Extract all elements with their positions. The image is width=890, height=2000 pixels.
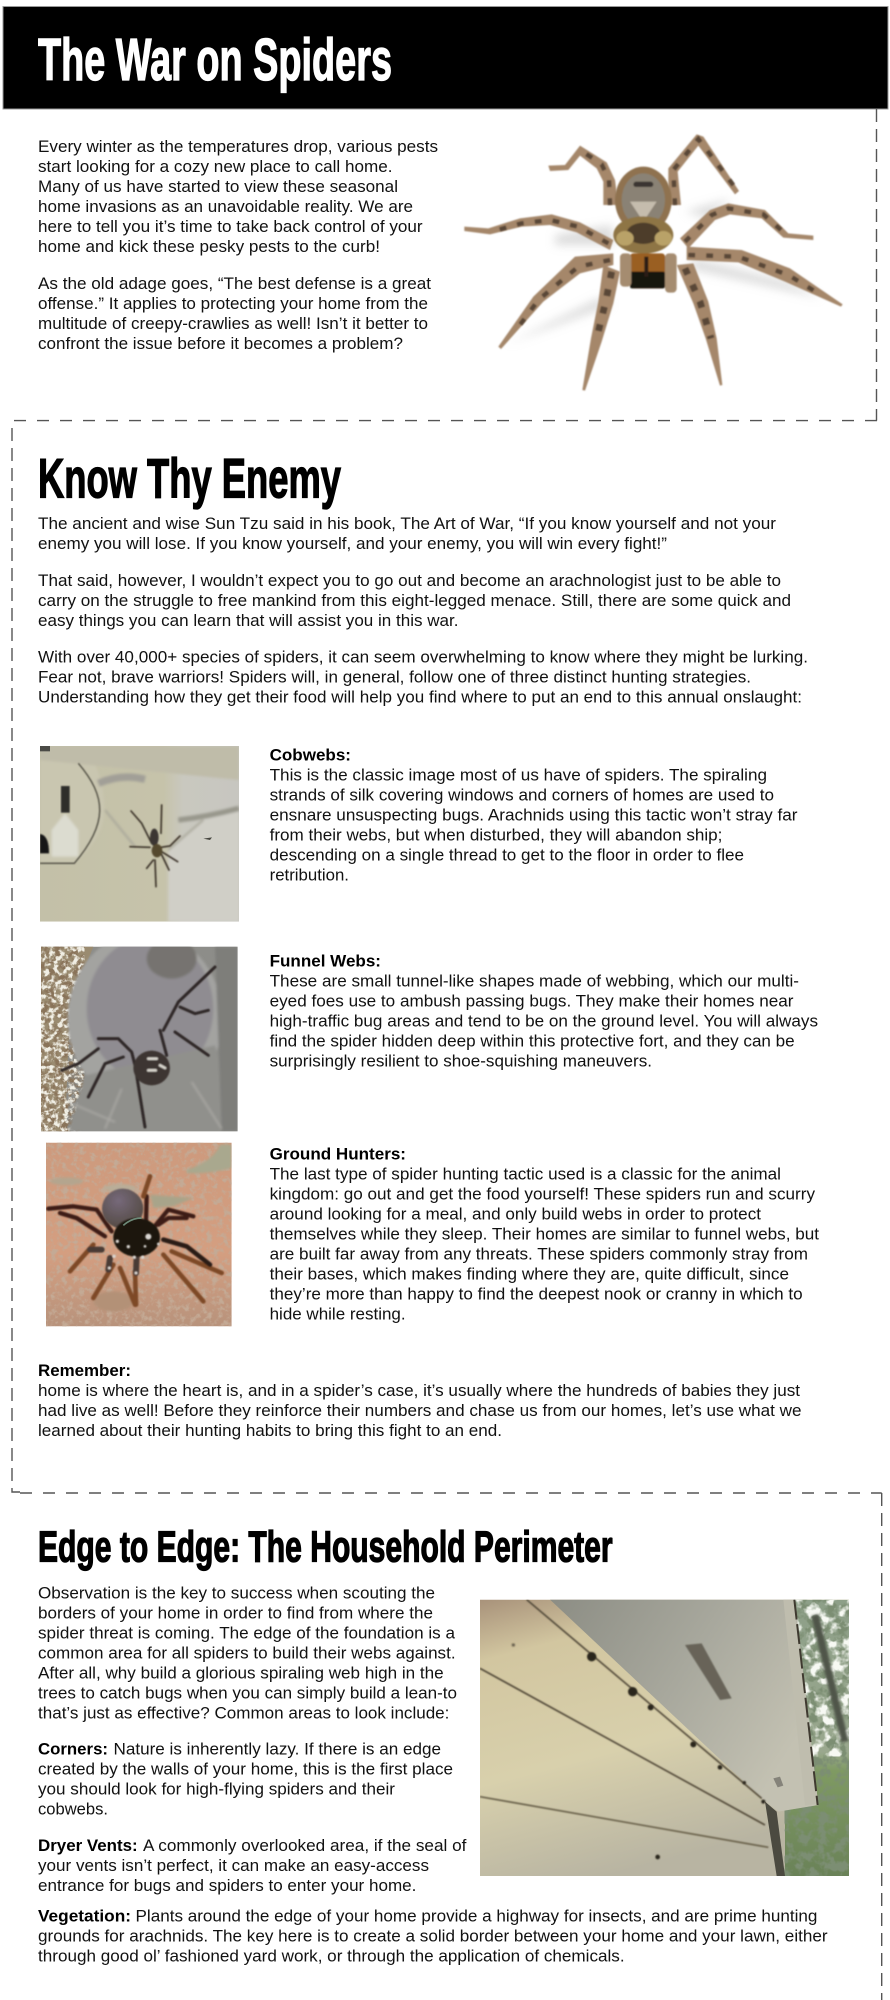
text block: ground hunters: they’re more than happy to find the deepest nook or cranny in which to <box>270 1286 803 1304</box>
text block: vegetation: through good ol’ fashioned yard work, or through the application of chemicals. <box>38 1948 625 1966</box>
text block: ground hunters: around looking for a meal, and only build webs in order to protect <box>270 1206 761 1224</box>
text block: dryer vents <box>38 1837 467 1895</box>
text block: hunting strategies paragraph: Fear not, brave warriors! Spiders will, in general, follow one of three distinct hunting strategies. <box>38 669 751 687</box>
text block: dryer vents: entrance for bugs and spiders to enter your home. <box>38 1877 416 1895</box>
text block: cobwebs: retribution. <box>270 866 349 884</box>
text block: vegetation: grounds for arachnids. The key here is to create a solid border between your home and your lawn, either <box>38 1928 828 1946</box>
text block: cobwebs: Cobwebs: <box>270 746 351 764</box>
funnel spider legs <box>62 967 215 1127</box>
text block: ground hunters: themselves while they sleep. Their homes are similar to funnel webs, but <box>270 1226 819 1244</box>
text block: intro first paragraph: start looking for a cozy new place to call home. <box>38 158 392 176</box>
text block: ground hunters: The last type of spider hunting tactic used is a classic for the animal <box>270 1166 781 1184</box>
text block: hunting strategies paragraph: With over 40,000+ species of spiders, it can seem overwhelming to know where they might be lurking. <box>38 649 808 667</box>
cephalothorax <box>613 216 673 254</box>
title banner <box>3 6 888 109</box>
text block: intro first paragraph: home and kick these pesky pests to the curb! <box>38 238 380 256</box>
text block: observation paragraph: spider threat is coming. The edge of the foundation is a <box>38 1624 456 1642</box>
image: funnel web spider <box>41 931 238 1131</box>
text block: corners: Corners: <box>38 1741 108 1759</box>
legs <box>548 146 618 205</box>
text block: funnel webs: Funnel Webs: <box>270 952 381 970</box>
text block: intro first paragraph <box>38 138 438 256</box>
text block: hunting strategies paragraph: Understanding how they get their food will help you find where to put an end to this annual onslaught: <box>38 689 802 707</box>
image: house siding and eaves <box>480 1600 849 1876</box>
text block: dryer vents: Dryer Vents: <box>38 1837 138 1855</box>
text block: corners: you should look for high-flying spiders and their <box>38 1781 396 1799</box>
text block: vegetation: Plants around the edge of your home provide a highway for insects, and are prime hunting <box>136 1908 817 1926</box>
text block: intro second paragraph: offense.” It applies to protecting your home from the <box>38 295 428 313</box>
panel: household perimeter <box>20 1493 882 2000</box>
text block: ground hunters <box>270 1146 819 1324</box>
text block: dryer vents: A commonly overlooked area, if the seal of <box>143 1837 467 1855</box>
text block: remember: home is where the heart is, and in a spider’s case, it’s usually where the hundreds of babies they just <box>38 1382 800 1400</box>
text block: vegetation: Vegetation: <box>38 1908 131 1926</box>
text block: corners: created by the walls of your home, this is the first place <box>38 1761 453 1779</box>
panel: know thy enemy <box>12 428 819 1492</box>
text block: cobwebs: This is the classic image most of us have of spiders. The spiraling <box>270 766 767 784</box>
image: cobweb spider on wall outlet <box>40 746 239 922</box>
text block: dryer vents: your vents isn’t perfect, it can make an easy-access <box>38 1857 429 1875</box>
ground spider legs <box>48 1176 222 1305</box>
image: ground hunter spider <box>46 1143 232 1326</box>
text block: remember: learned about their hunting habits to bring this fight to an end. <box>38 1422 502 1440</box>
text block: corners: Nature is inherently lazy. If there is an edge <box>114 1741 441 1759</box>
small spider <box>130 805 180 887</box>
text block: observation paragraph: common area for all spiders to build their webs against. <box>38 1644 456 1662</box>
text block: observation paragraph: borders of your home in order to find from where the <box>38 1604 433 1622</box>
panel: introduction <box>12 109 877 428</box>
text block: vegetation <box>38 1908 828 1966</box>
text block: remember <box>38 1362 802 1440</box>
leg markings <box>492 139 818 338</box>
fangs <box>630 253 665 288</box>
text block: intro second paragraph <box>38 275 431 353</box>
abdomen <box>615 167 672 233</box>
text block: intro first paragraph: Every winter as the temperatures drop, various pests <box>38 138 438 156</box>
text block: corners <box>38 1741 453 1819</box>
text block: intro second paragraph: confront the issue before it becomes a problem? <box>38 335 403 353</box>
text block: arachnologist paragraph: That said, however, I wouldn’t expect you to go out and become an arachnologist just to be able to <box>38 572 781 590</box>
text block: corners: cobwebs. <box>38 1801 108 1819</box>
text block: observation paragraph <box>38 1584 457 1722</box>
heading: Edge to Edge: The Household Perimeter <box>38 1523 613 1572</box>
text block: observation paragraph: trees to catch bugs when you can simply build a lean-to <box>38 1684 457 1702</box>
text block: funnel webs: find the spider hidden deep within this protective fort, and they can be <box>270 1032 795 1050</box>
text block: Sun Tzu quote <box>38 515 777 553</box>
text block: ground hunters: Ground Hunters: <box>270 1146 406 1164</box>
text block: ground hunters: are built far away from any threats. These spiders commonly stray from <box>270 1246 808 1264</box>
text block: cobwebs: from their webs, but when disturbed, they will abandon ship; <box>270 826 722 844</box>
text block: Sun Tzu quote: enemy you will lose. If you know yourself, and your enemy, you will win every fight!” <box>38 535 667 553</box>
text block: ground hunters: their bases, which makes finding where they are, quite difficult, since <box>270 1266 789 1284</box>
text block: ground hunters: hide while resting. <box>270 1306 406 1324</box>
text block: observation paragraph: After all, why build a glorious spiraling web high in the <box>38 1664 444 1682</box>
text block: arachnologist paragraph: carry on the struggle to free mankind from this eight-legged menace. Still, there are some quick and <box>38 592 791 610</box>
text block: hunting strategies paragraph <box>38 649 808 707</box>
text block: remember: had live as well! Before they reinforce their numbers and chase us from our homes, let’s use what we <box>38 1402 802 1420</box>
text block: intro first paragraph: here to tell you it’s time to take back control of your <box>38 218 423 236</box>
image: wolf spider <box>464 134 843 391</box>
text block: funnel webs: surprisingly resilient to shoe-squishing maneuvers. <box>270 1052 652 1070</box>
text block: cobwebs: strands of silk covering windows and corners of homes are used to <box>270 786 774 804</box>
text block: intro first paragraph: Many of us have started to view these seasonal <box>38 178 398 196</box>
text block: observation paragraph: that’s just as effective? Common areas to look include: <box>38 1704 449 1722</box>
text block: arachnologist paragraph: easy things you can learn that will assist you in this war. <box>38 612 458 630</box>
text block: funnel webs: These are small tunnel-like shapes made of webbing, which our multi- <box>270 972 799 990</box>
text block: observation paragraph: Observation is the key to success when scouting the <box>38 1584 435 1602</box>
text block: intro second paragraph: As the old adage goes, “The best defense is a great <box>38 275 431 293</box>
text block: intro second paragraph: multitude of creepy-crawlies as well! Isn’t it better to <box>38 315 428 333</box>
text block: Sun Tzu quote: The ancient and wise Sun Tzu said in his book, The Art of War, “If you know yourself and not your <box>38 515 777 533</box>
text block: funnel webs: eyed foes use to ambush passing bugs. They make their homes near <box>270 992 794 1010</box>
text block: cobwebs <box>270 746 798 884</box>
text block: ground hunters: kingdom: go out and get the food yourself! These spiders run and scurry <box>270 1186 816 1204</box>
text block: intro first paragraph: home invasions as an unavoidable reality. We are <box>38 198 413 216</box>
heading: Know Thy Enemy <box>38 447 341 510</box>
text block: arachnologist paragraph <box>38 572 791 630</box>
text block: cobwebs: descending on a single thread to get to the floor in order to flee <box>270 846 744 864</box>
text block: funnel webs: high-traffic bug areas and tend to be on the ground level. You will always <box>270 1012 818 1030</box>
title: The War on Spiders <box>38 27 392 93</box>
text block: remember: Remember: <box>38 1362 131 1380</box>
text block: funnel webs <box>270 952 818 1070</box>
text block: cobwebs: ensnare unsuspecting bugs. Arachnids using this tactic won’t stray far <box>270 806 798 824</box>
